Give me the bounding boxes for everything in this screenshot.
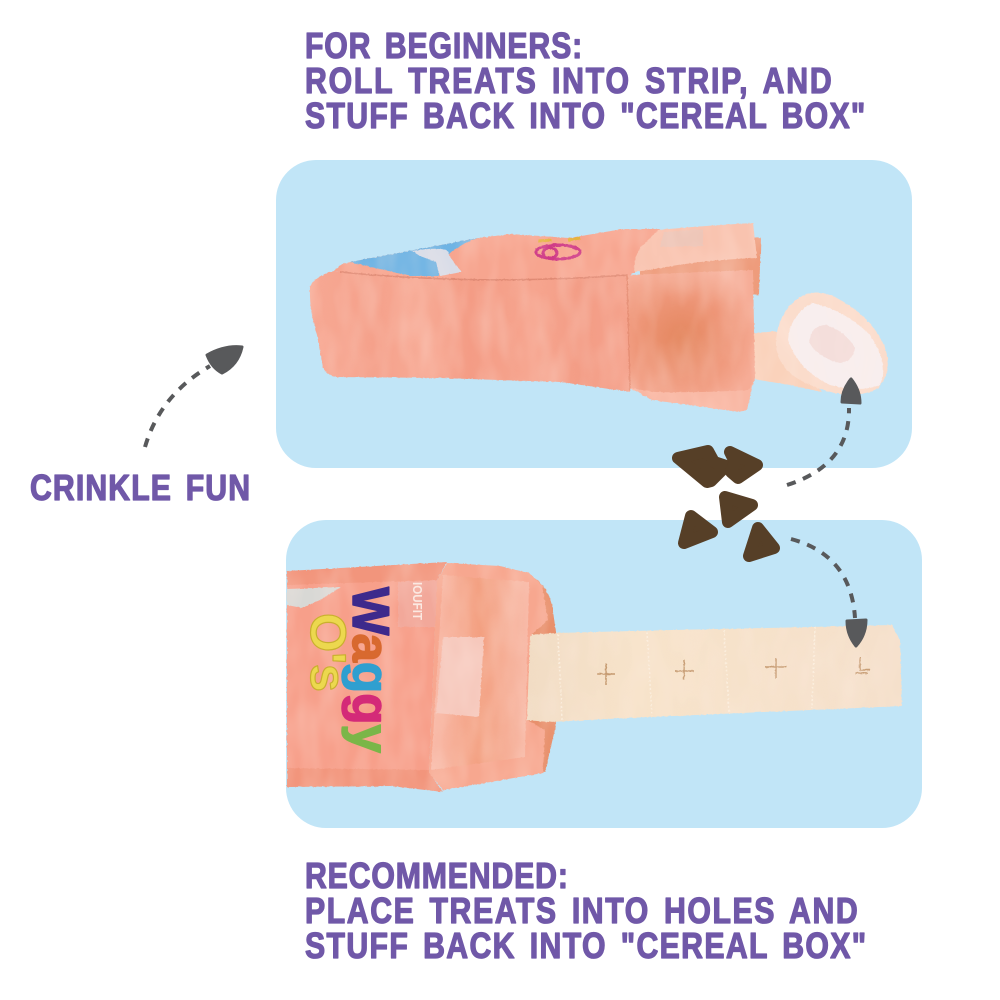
- treats: pile of kibble: [678, 451, 774, 556]
- heading: recommended: STUFF BACK INTO "CEREAL BOX": [305, 927, 866, 967]
- box body: [287, 562, 447, 792]
- box top flap: [634, 223, 757, 272]
- panel: top blue background: [276, 160, 912, 468]
- heading: recommended: RECOMMENDED:: [305, 857, 568, 897]
- box bottom flap: [630, 370, 755, 412]
- photo: rolled toy in cereal box: [310, 223, 888, 412]
- heading: for beginners: STUFF BACK INTO "CEREAL BOX": [305, 97, 865, 137]
- dark inside of box: [525, 575, 556, 775]
- panel: bottom blue background: [286, 520, 922, 828]
- heading: recommended: [305, 857, 866, 967]
- lighter print strip: [398, 580, 437, 627]
- flap centre: [431, 575, 529, 770]
- box end flap: [429, 563, 548, 790]
- treat holes: [597, 657, 870, 685]
- heading: for beginners: FOR BEGINNERS:: [305, 27, 582, 67]
- velcro: [436, 637, 484, 717]
- strip seams: [558, 627, 815, 720]
- strip neck: [750, 331, 822, 392]
- velcro top: [660, 229, 703, 247]
- white print: [287, 587, 341, 608]
- heading: for beginners: ROLL TREATS INTO STRIP, AND: [305, 62, 832, 102]
- embroidered logo: IOUFIT: [410, 582, 425, 620]
- seam: end panel: [627, 275, 630, 390]
- box rear edge: [640, 236, 761, 295]
- seam: top edge: [340, 272, 627, 280]
- embroidered logo: W a g g y: [341, 587, 399, 753]
- arrow: crinkle fun: [145, 347, 242, 447]
- box front long side: [310, 271, 630, 392]
- heading: recommended: PLACE TREATS INTO HOLES AND: [305, 892, 858, 932]
- box top face: [334, 229, 660, 282]
- photo: open strip with treat holes: [287, 562, 902, 792]
- embroidered logo: [300, 582, 425, 753]
- arrow: treats to roll: [787, 379, 860, 485]
- fabric strip: [525, 625, 902, 722]
- blue print on top face: [350, 238, 478, 276]
- rolled strip: [776, 292, 888, 395]
- embroidered logo: O's: [300, 613, 356, 692]
- heading: for beginners: [305, 27, 865, 137]
- embroidered letters top: [536, 238, 580, 259]
- label: crinkle fun: CRINKLE FUN: [30, 469, 250, 509]
- box end panel: [627, 270, 755, 392]
- box face: [287, 580, 437, 770]
- arrow: treats to strip holes: [791, 539, 866, 646]
- white print on top face: [412, 249, 462, 276]
